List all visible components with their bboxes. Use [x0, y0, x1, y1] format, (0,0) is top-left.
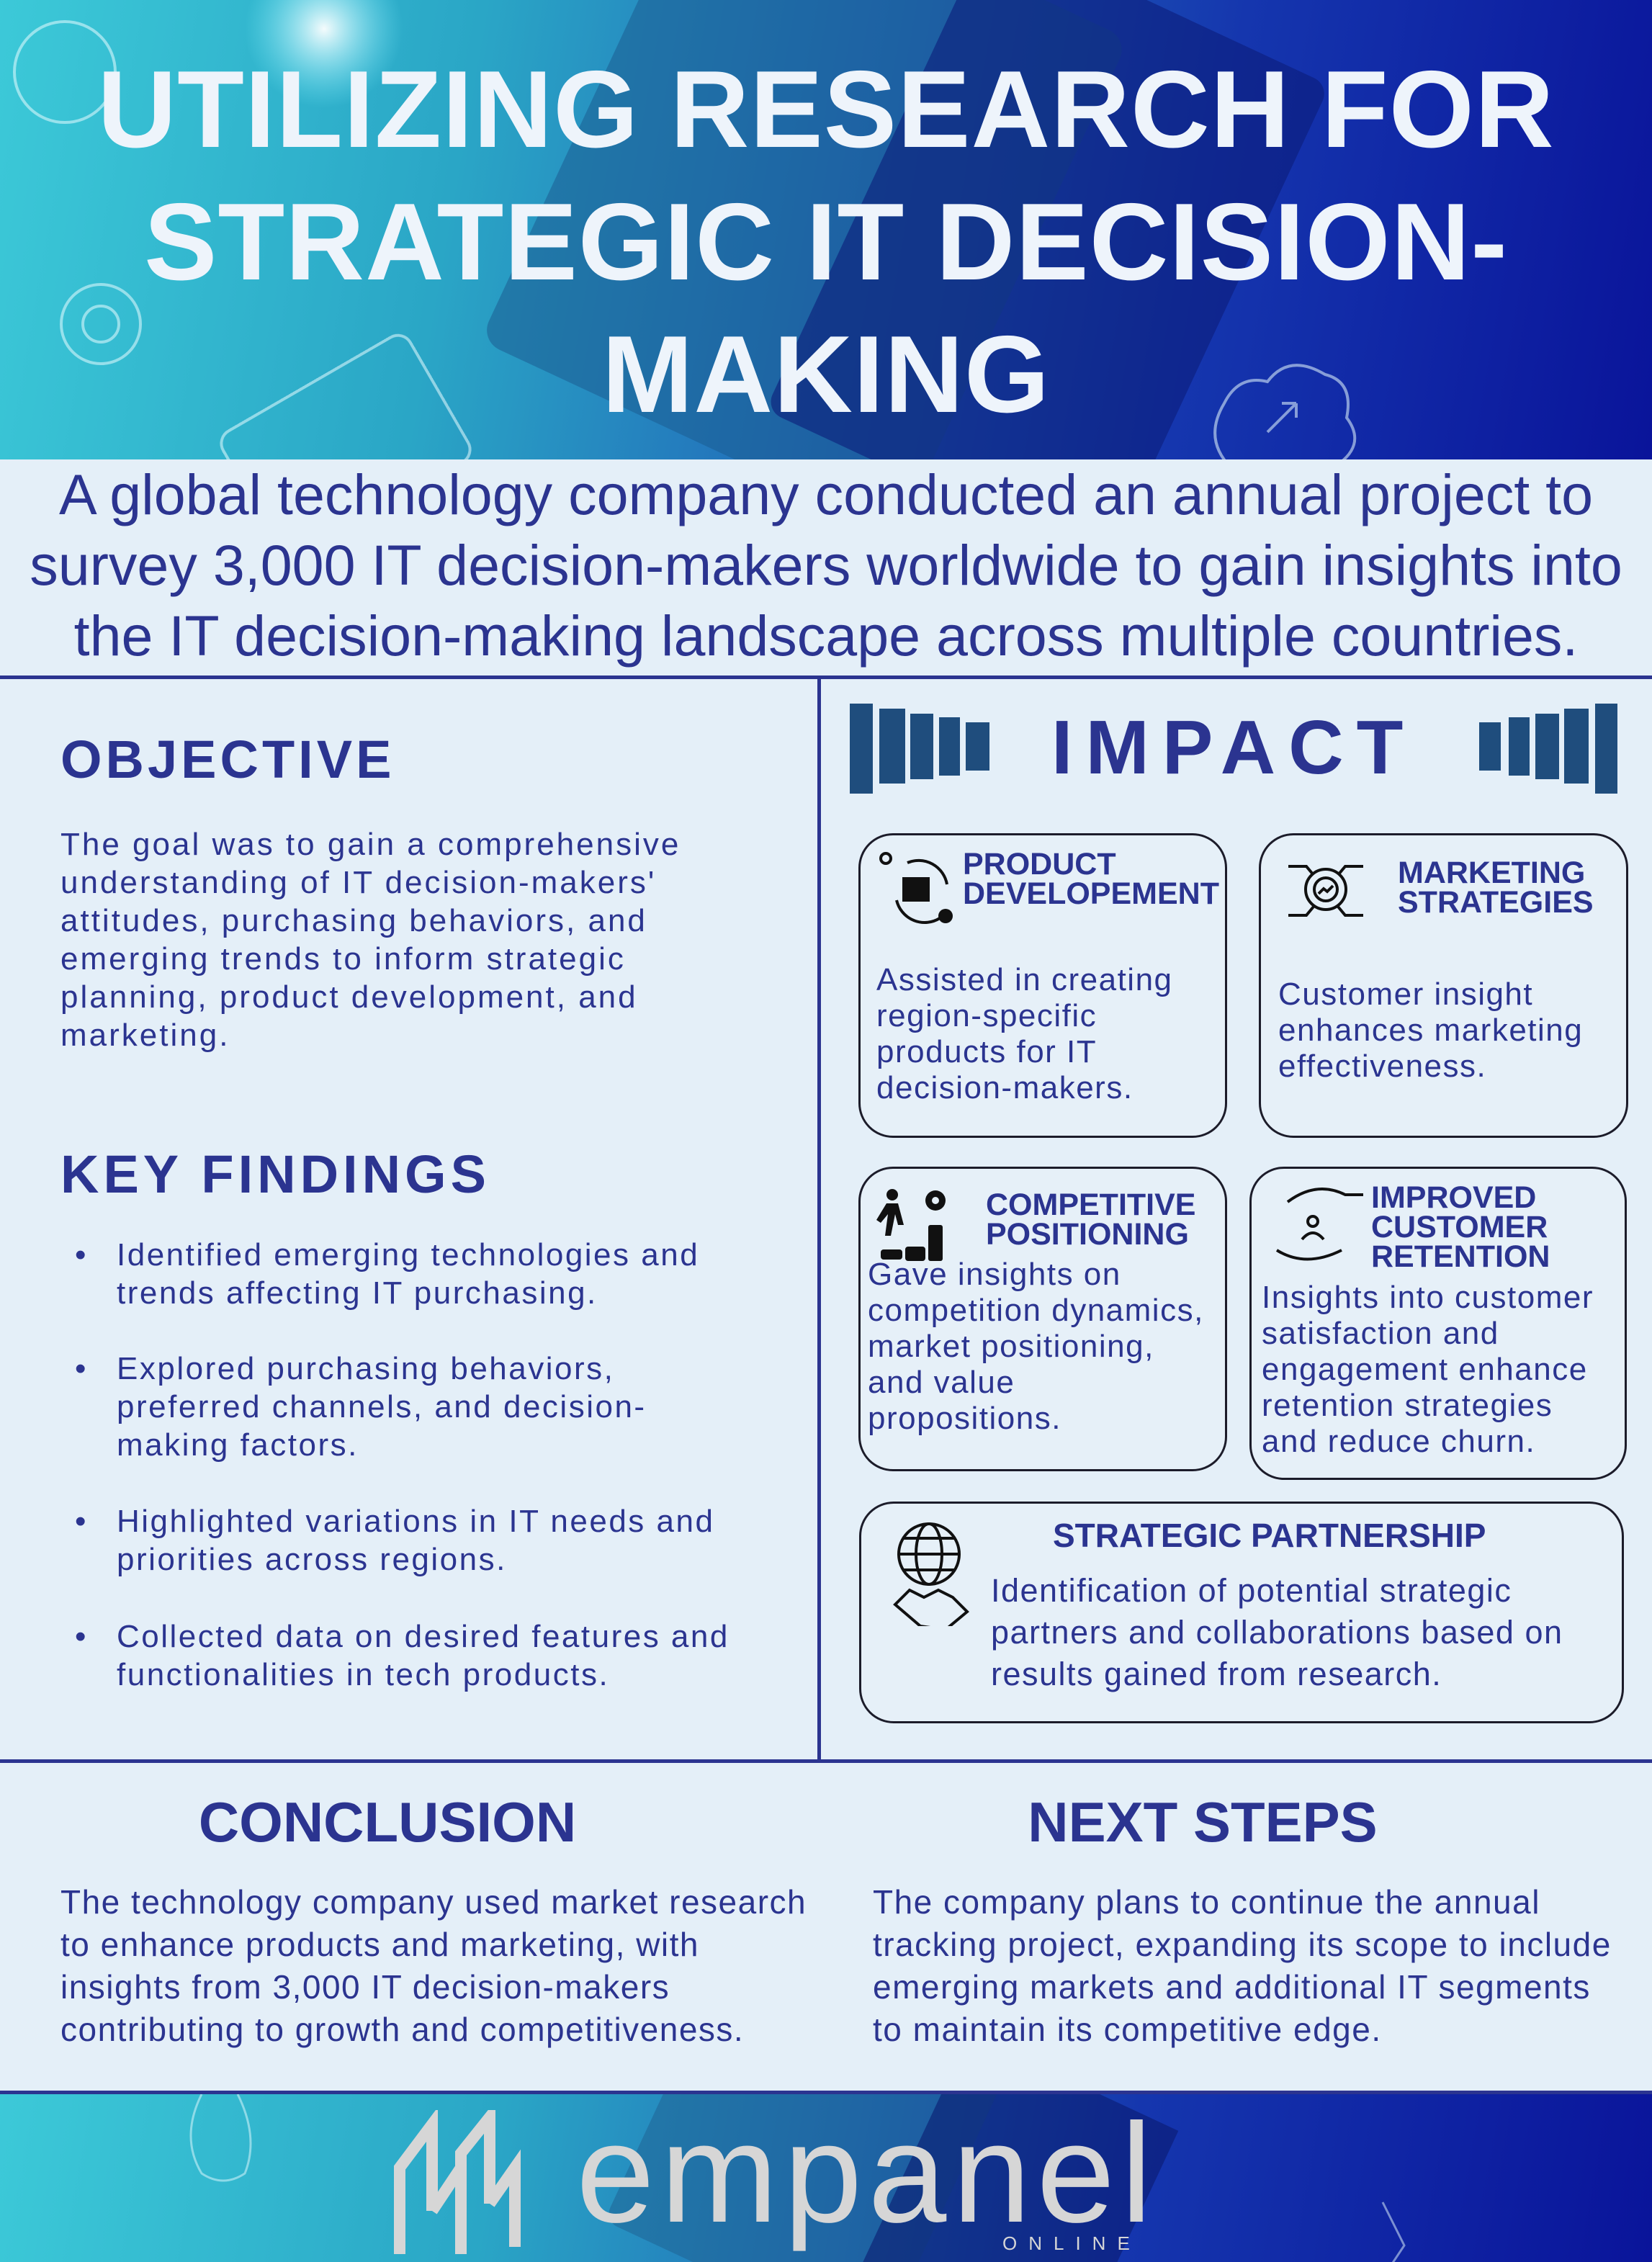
- card: product development: DEVELOPEMENT: [963, 876, 1219, 911]
- card: product development: products for IT: [876, 1034, 1097, 1069]
- title: UTILIZING RESEARCH FOR: [97, 48, 1555, 171]
- objective text: The goal was to gain a comprehensive: [60, 827, 681, 862]
- card: improved customer retention: CUSTOMER: [1371, 1210, 1548, 1244]
- key finding 2: making factors.: [117, 1427, 359, 1463]
- card: marketing strategies: [1259, 833, 1628, 1138]
- icon: product box cycle: [879, 852, 953, 924]
- key finding 1: [75, 1237, 699, 1311]
- card: competitive positioning: [858, 1167, 1227, 1471]
- card: strategic partnership: Identification of potential strategic: [991, 1572, 1512, 1609]
- objective text: marketing.: [60, 1018, 230, 1053]
- card: improved customer retention: satisfaction and: [1262, 1316, 1499, 1351]
- objective text: [60, 827, 681, 1053]
- icon: climbing person and map pin: [876, 1189, 946, 1261]
- objective text: emerging trends to inform strategic: [60, 941, 626, 977]
- key finding 2: Explored purchasing behaviors,: [117, 1351, 614, 1386]
- logo subtitle: ONLINE: [1002, 2232, 1141, 2254]
- next steps text: to maintain its competitive edge.: [873, 2011, 1382, 2048]
- card: competitive positioning: propositions.: [868, 1401, 1061, 1436]
- card: product development: region-specific: [876, 998, 1097, 1033]
- intro text: the IT decision-making landscape across multiple countries.: [74, 603, 1578, 668]
- decorative background art: [13, 0, 1357, 459]
- title: STRATEGIC IT DECISION-: [144, 181, 1508, 303]
- title: MAKING: [602, 313, 1050, 436]
- card: competitive positioning: market positioning,: [868, 1329, 1154, 1364]
- objective heading: OBJECTIVE: [60, 730, 395, 789]
- card: improved customer retention: and reduce churn.: [1262, 1424, 1535, 1459]
- key finding 3: priorities across regions.: [117, 1542, 507, 1577]
- icon: globe with handshake: [893, 1522, 969, 1626]
- next steps text: tracking project, expanding its scope to include: [873, 1926, 1612, 1963]
- key finding 4: functionalities in tech products.: [117, 1657, 609, 1692]
- card: improved customer retention: engagement enhance: [1262, 1352, 1588, 1387]
- logo icon: [394, 2110, 521, 2254]
- key finding 2: [75, 1351, 647, 1463]
- icon: right bars: [1479, 704, 1617, 794]
- card: product development: decision-makers.: [876, 1070, 1133, 1105]
- card: marketing strategies: MARKETING: [1398, 856, 1585, 890]
- card: marketing strategies: STRATEGIES: [1398, 885, 1594, 920]
- key finding 4: [75, 1619, 730, 1692]
- header banner: [0, 0, 1652, 459]
- conclusion text: contributing to growth and competitiveness.: [60, 2011, 744, 2048]
- footer banner with logo: [0, 2094, 1652, 2262]
- card: competitive positioning: COMPETITIVE: [986, 1188, 1195, 1222]
- key finding 1: trends affecting IT purchasing.: [117, 1275, 598, 1311]
- key finding 4: Collected data on desired features and: [117, 1619, 730, 1654]
- next steps heading: NEXT STEPS: [1028, 1790, 1378, 1854]
- card: competitive positioning: and value: [868, 1365, 1015, 1400]
- conclusion text: to enhance products and marketing, with: [60, 1926, 699, 1963]
- next steps text: [873, 1883, 1612, 2048]
- impact heading with bars: IMPACT: [1051, 705, 1416, 790]
- conclusion text: insights from 3,000 IT decision-makers: [60, 1968, 670, 2006]
- impact heading with bars: [850, 704, 1617, 794]
- icon: left bars: [850, 704, 989, 794]
- card: product development: Assisted in creating: [876, 962, 1173, 997]
- title: [97, 48, 1555, 436]
- key findings heading: KEY FINDINGS: [60, 1144, 490, 1204]
- card: marketing strategies: effectiveness.: [1278, 1049, 1486, 1084]
- card: improved customer retention: IMPROVED: [1371, 1180, 1536, 1215]
- card: improved customer retention: Insights into customer: [1262, 1280, 1594, 1315]
- intro text: A global technology company conducted an annual project to: [59, 462, 1593, 526]
- key finding 1: •: [75, 1237, 88, 1273]
- key finding 4: •: [75, 1619, 88, 1654]
- card: strategic partnership: results gained from research.: [991, 1656, 1442, 1692]
- card: strategic partnership: [859, 1502, 1624, 1723]
- objective text: understanding of IT decision-makers': [60, 865, 656, 900]
- next steps text: The company plans to continue the annual: [873, 1883, 1540, 1921]
- intro text: survey 3,000 IT decision-makers worldwide to gain insights into: [30, 533, 1622, 597]
- conclusion text: The technology company used market research: [60, 1883, 807, 1921]
- card: product development: [858, 833, 1227, 1138]
- objective text: attitudes, purchasing behaviors, and: [60, 903, 647, 938]
- key finding 1: Identified emerging technologies and: [117, 1237, 699, 1273]
- conclusion heading: CONCLUSION: [199, 1790, 576, 1854]
- key finding 3: •: [75, 1504, 88, 1539]
- card: marketing strategies: Customer insight: [1278, 977, 1533, 1012]
- objective text: planning, product development, and: [60, 979, 638, 1015]
- card: strategic partnership: partners and collaborations based on: [991, 1614, 1563, 1651]
- key finding 2: •: [75, 1351, 88, 1386]
- key finding 3: Highlighted variations in IT needs and: [117, 1504, 714, 1539]
- intro text: [30, 462, 1622, 668]
- icon: hands holding person: [1276, 1188, 1363, 1260]
- card: improved customer retention: RETENTION: [1371, 1239, 1550, 1274]
- key finding 3: [75, 1504, 714, 1577]
- conclusion text: [60, 1883, 807, 2048]
- card: improved customer retention: [1249, 1167, 1627, 1480]
- key finding 2: preferred channels, and decision-: [117, 1389, 647, 1424]
- card: improved customer retention: retention strategies: [1262, 1388, 1553, 1423]
- icon: gear network: [1288, 865, 1363, 917]
- card: strategic partnership: STRATEGIC PARTNERSHIP: [1053, 1517, 1486, 1554]
- next steps text: emerging markets and additional IT segments: [873, 1968, 1591, 2006]
- card: marketing strategies: enhances marketing: [1278, 1013, 1583, 1048]
- card: competitive positioning: Gave insights on: [868, 1257, 1121, 1292]
- logo wordmark: empanel: [576, 2094, 1158, 2252]
- card: competitive positioning: competition dynamics,: [868, 1293, 1204, 1328]
- card: competitive positioning: POSITIONING: [986, 1217, 1189, 1252]
- card: product development: PRODUCT: [963, 847, 1116, 881]
